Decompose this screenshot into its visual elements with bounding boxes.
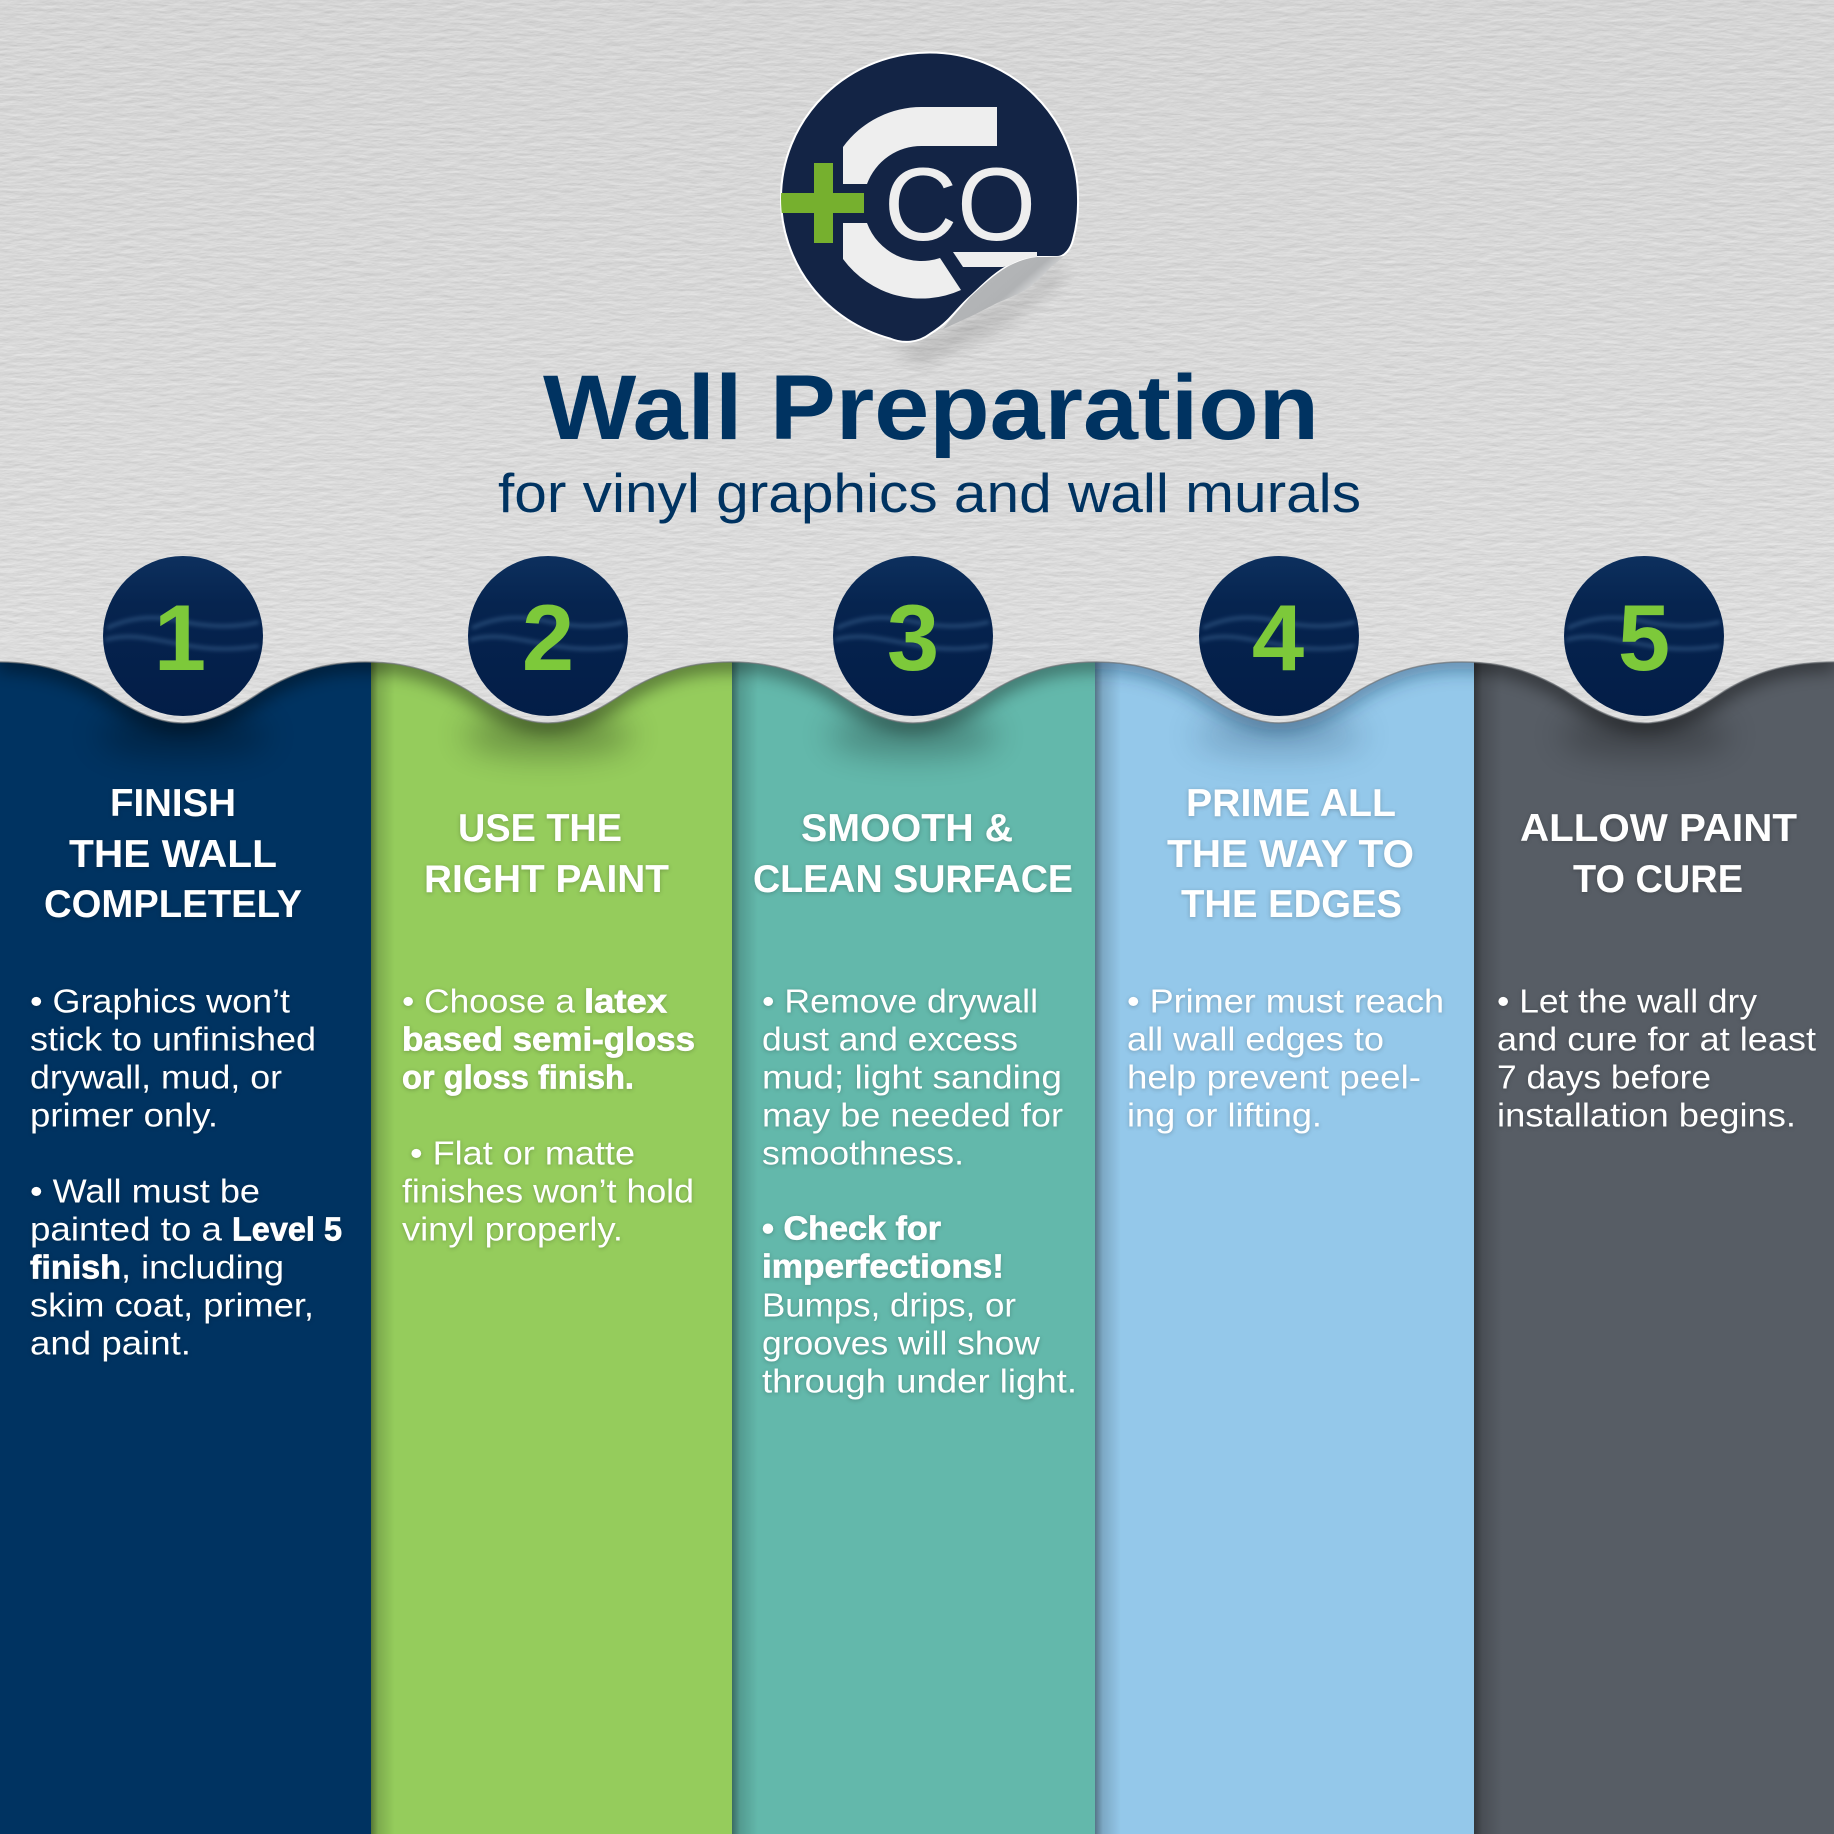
heading: finish the wall completely: FINISH [110, 782, 236, 825]
panel: step 3 smooth and clean surface [732, 662, 1095, 1834]
heading: use the right paint: USE THE [458, 807, 622, 850]
heading: finish the wall completely: COMPLETELY [44, 883, 302, 926]
body text: step 1: Level 5 [232, 1210, 342, 1248]
title: Wall Preparation [543, 357, 1319, 459]
body text: step 1: and paint. [30, 1324, 191, 1362]
logo sticker [781, 52, 1078, 362]
body text: step 1: painted to a [30, 1210, 223, 1248]
number badge 1 [103, 556, 263, 716]
body text: step 5: • Let the wall dry [1497, 982, 1758, 1020]
number badge 2 [468, 556, 628, 716]
body text: step 4 [1127, 982, 1444, 1134]
body text: step 5: and cure for at least [1497, 1020, 1816, 1058]
logo: CO lettering: CO [884, 147, 1036, 263]
body text: step 3 [762, 982, 1077, 1400]
number badge 2: 2 [522, 585, 574, 690]
heading: smooth and clean surface [753, 807, 1073, 901]
body text: step 1: primer only. [30, 1096, 218, 1134]
heading: finish the wall completely [44, 782, 302, 926]
number badge 4: 4 [1252, 585, 1304, 690]
heading: use the right paint: RIGHT PAINT [424, 858, 669, 901]
body text: step 3: through under light. [762, 1362, 1077, 1400]
heading: prime all the way to the edges: THE EDGES [1181, 883, 1402, 926]
body text: step 4: all wall edges to [1127, 1020, 1384, 1058]
number badge 3: 3 [887, 585, 939, 690]
panel: step 2 use the right paint [371, 662, 732, 1834]
heading: prime all the way to the edges: PRIME ALL [1186, 782, 1396, 825]
number badge 1: 1 [154, 585, 206, 690]
heading: smooth and clean surface: SMOOTH & [801, 807, 1013, 850]
body text: step 1 [30, 982, 342, 1362]
panel: step 5 allow paint to cure [1474, 662, 1834, 1834]
body text: step 4: ing or lifting. [1127, 1096, 1322, 1134]
body text: step 3: dust and excess [762, 1020, 1018, 1058]
heading: finish the wall completely: THE WALL [69, 833, 277, 876]
body text: step 2: • Flat or matte [410, 1134, 635, 1172]
body text: step 3: imperfections! [762, 1248, 1004, 1284]
body text: step 3: • Check for [762, 1210, 941, 1246]
body text: step 3: grooves will show [762, 1324, 1040, 1362]
logo: white C mark [843, 107, 1037, 299]
number badge 4 [1199, 556, 1359, 716]
body text: step 5: installation begins. [1497, 1096, 1796, 1134]
body text: step 2: latex [584, 982, 668, 1020]
heading: allow paint to cure: ALLOW PAINT [1520, 807, 1797, 850]
subtitle: for vinyl graphics and wall murals [498, 462, 1361, 524]
number badge 5: 5 [1618, 585, 1670, 690]
body text: step 5: 7 days before [1497, 1058, 1711, 1096]
body text: step 5 [1497, 982, 1816, 1134]
body text: step 1: drywall, mud, or [30, 1058, 282, 1096]
logo: green plus [781, 163, 864, 243]
body text: step 4: help prevent peel- [1127, 1058, 1421, 1096]
heading: prime all the way to the edges [1167, 782, 1414, 926]
body text: step 1: • Wall must be [30, 1172, 260, 1210]
heading: prime all the way to the edges: THE WAY TO [1167, 833, 1414, 876]
body text: step 1: , including [121, 1248, 284, 1286]
logo: peeled corner [943, 256, 1064, 329]
heading: use the right paint [424, 807, 669, 901]
heading: allow paint to cure [1520, 807, 1797, 901]
body text: step 3: mud; light sanding [762, 1058, 1062, 1096]
body text: step 3: smoothness. [762, 1134, 964, 1172]
body text: step 1: skim coat, primer, [30, 1286, 314, 1324]
body text: step 1: • Graphics won’t [30, 982, 290, 1020]
number badge 5 [1564, 556, 1724, 716]
number badge 3 [833, 556, 993, 716]
panel: step 1 finish the wall [0, 662, 371, 1834]
body text: step 2: • Choose a [402, 982, 576, 1020]
body text: step 1: finish [30, 1248, 121, 1286]
body text: step 3: may be needed for [762, 1096, 1063, 1134]
panel: step 4 prime all the way to the edges [1095, 662, 1474, 1834]
body text: step 1: stick to unfinished [30, 1020, 316, 1058]
body text: step 4: • Primer must reach [1127, 982, 1444, 1020]
body text: step 3: Bumps, drips, or [762, 1286, 1016, 1324]
body text: step 2: based semi-gloss [402, 1020, 695, 1058]
body text: step 2: or gloss finish. [402, 1058, 634, 1096]
body text: step 2: vinyl properly. [402, 1210, 623, 1248]
heading: smooth and clean surface: CLEAN SURFACE [753, 858, 1073, 901]
body text: step 2 [402, 982, 695, 1248]
body text: step 3: • Remove drywall [762, 982, 1038, 1020]
body text: step 2: finishes won’t hold [402, 1172, 694, 1210]
heading: allow paint to cure: TO CURE [1573, 858, 1743, 901]
textured wall background [0, 0, 1834, 740]
